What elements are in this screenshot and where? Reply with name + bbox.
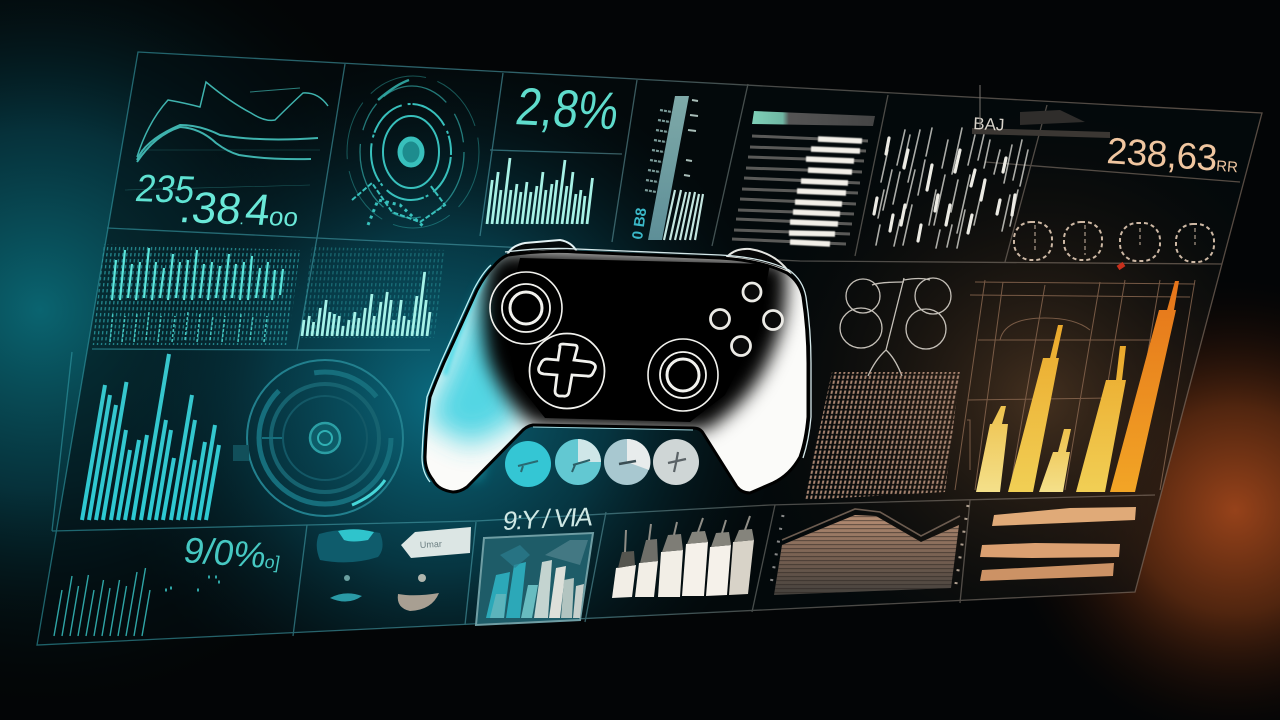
chart: large cyan bars (82, 354, 219, 520)
teal blob (317, 530, 383, 562)
chart: orange horizontal bars (980, 507, 1136, 581)
text: 238,63 RR value: 238,63RR (1105, 130, 1240, 180)
bar 3 (1039, 429, 1071, 492)
text: vertical label: 0 B8 (629, 207, 650, 241)
chart: ring gauge (233, 360, 403, 516)
line series (137, 82, 328, 157)
icons: dotted circle row (1014, 222, 1214, 268)
small teal shape (330, 593, 362, 602)
chart: white rain-streak bars (874, 128, 1028, 248)
text: BAJ: BAJ (973, 114, 1005, 135)
panel: blobs and label card (317, 527, 471, 611)
bar 1 (976, 406, 1008, 492)
panel: line chart (125, 82, 328, 190)
icons: four status discs (505, 439, 699, 487)
d-pad (530, 334, 604, 408)
dashboard grid lines (37, 52, 1262, 645)
chart: area chart (770, 505, 968, 595)
game controller (415, 240, 815, 500)
chart: dot matrix (804, 372, 960, 500)
text: 9:Y / VIA label: 9:Y / VIA (501, 501, 595, 536)
label: header strip with BAJ text (972, 85, 1110, 138)
left thumbstick (490, 272, 562, 344)
disc three (604, 439, 650, 485)
text: metric 235: 235 (133, 167, 198, 211)
chart: horizontal white bars (732, 111, 875, 244)
chart: row two teal bars (300, 247, 446, 338)
bumpers (507, 240, 577, 256)
swatch bar (752, 111, 875, 126)
chart: orange rising bars (976, 281, 1179, 492)
text: 2,8% value: 2,8% (512, 78, 623, 141)
text: 9/0% value: 9/0%o] (181, 529, 285, 577)
white label card (401, 527, 471, 558)
panel: concentric radar gauge (347, 76, 479, 228)
text: metric .38 400: .38.4oo (177, 183, 302, 236)
controller body (426, 252, 806, 492)
chart: slider column (629, 96, 703, 241)
icon: branching outline sketch (840, 278, 951, 376)
controller outline (425, 251, 808, 493)
right thumbstick (648, 339, 718, 411)
beige shape (398, 593, 439, 611)
text: card label: Umar (420, 539, 442, 550)
chart: dense teal data field (92, 244, 300, 345)
disc one (505, 441, 551, 487)
chart: teal to white bars in frame (476, 533, 593, 625)
chart: orange grid (955, 280, 1195, 490)
disc four (653, 439, 699, 485)
face buttons (710, 283, 782, 356)
chart: faint bottom-left bars and dots (54, 568, 221, 636)
bar 5 (1110, 281, 1179, 492)
disc two (555, 439, 601, 485)
bar 2 (1008, 325, 1063, 492)
dashboard panel backdrop (37, 52, 1262, 645)
bar 4 (1076, 346, 1126, 492)
chart: white vertical bars (612, 516, 754, 598)
controller glow (438, 265, 520, 480)
chart: small teal bars (487, 158, 592, 224)
